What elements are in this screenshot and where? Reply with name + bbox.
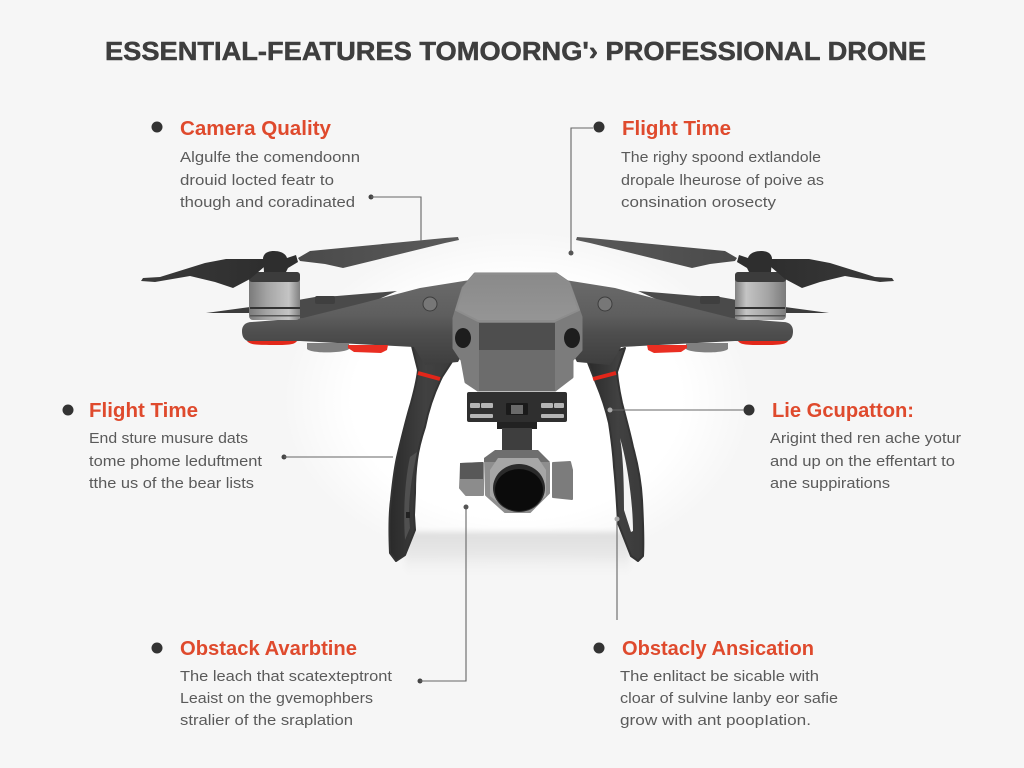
body side lens right bbox=[564, 328, 580, 348]
rear arm bbox=[298, 291, 397, 320]
right landing leg bbox=[587, 348, 643, 561]
motor bbox=[249, 272, 300, 320]
background glow bbox=[282, 230, 752, 570]
red band bbox=[593, 373, 616, 379]
feature: Obstacly Ansication: The enlitact be sicable with bbox=[620, 668, 819, 685]
camera mount bracket bbox=[467, 392, 567, 429]
body side lens left bbox=[455, 328, 471, 348]
left landing leg bbox=[389, 346, 455, 561]
leader line bbox=[608, 408, 744, 412]
feature: Obstack Avarbtine: Obstack Avarbtine bbox=[180, 638, 357, 660]
feature: Camera Quality bbox=[152, 118, 421, 241]
propeller blade right bbox=[298, 237, 459, 268]
camera gimbal bbox=[460, 428, 572, 512]
feature: Flight Time left bbox=[62, 400, 393, 492]
leader line bbox=[282, 454, 393, 460]
leader line bbox=[568, 128, 593, 256]
feature: Obstacly Ansication: grow with ant poopIation. bbox=[620, 712, 811, 729]
leader line bbox=[614, 516, 620, 620]
propeller hub bbox=[263, 251, 298, 272]
feature: Flight Time left: tome phome leduftment bbox=[89, 453, 263, 470]
feature: Camera Quality: drouid locted featr to bbox=[180, 172, 334, 189]
leader line bbox=[368, 194, 421, 241]
feature: Lie Gcupatton: and up on the effentart to bbox=[770, 453, 955, 470]
feature: Obstack Avarbtine: stralier of the sraplation bbox=[180, 712, 353, 729]
feature: Flight Time right: consination orosecty bbox=[621, 194, 777, 211]
feature: Obstack Avarbtine bbox=[152, 504, 468, 729]
camera housing bbox=[485, 451, 549, 512]
underside red light bbox=[247, 341, 297, 345]
feature: Lie Gcupatton: ane suppirations bbox=[770, 475, 890, 492]
ground shadow bbox=[405, 532, 630, 578]
drone illustration bbox=[141, 237, 894, 578]
propeller blade left bbox=[141, 259, 264, 288]
feature: Obstack Avarbtine: The leach that scatexteptront bbox=[180, 668, 393, 685]
gimbal left motor bbox=[460, 463, 483, 495]
left arm with motor and propellers bbox=[141, 237, 470, 365]
arm body bbox=[242, 280, 470, 365]
red indicator bbox=[348, 345, 388, 353]
feature: Lie Gcupatton: Lie Gcupatton: bbox=[772, 400, 914, 422]
feature: Flight Time left: End sture musure dats bbox=[89, 430, 248, 447]
central body bbox=[454, 274, 581, 391]
feature: Obstacly Ansication bbox=[594, 516, 838, 729]
gimbal neck bbox=[502, 428, 532, 452]
right arm with motor and propellers bbox=[565, 237, 894, 365]
feature: Obstack Avarbtine: Leaist on the gvemophbers bbox=[180, 690, 373, 707]
feature: Flight Time left: Flight Time bbox=[89, 400, 198, 422]
feature: Flight Time right bbox=[568, 118, 824, 256]
leader line bbox=[418, 504, 468, 684]
feature: Obstacly Ansication: cloar of sulvine lanby eor safie bbox=[620, 690, 838, 707]
lower folded propeller bbox=[206, 307, 250, 313]
feature: Flight Time right: Flight Time bbox=[622, 118, 731, 140]
feature: Lie Gcupatton: Arigint thed ren ache yotur bbox=[770, 430, 961, 447]
feature: Camera Quality: Camera Quality bbox=[180, 118, 332, 140]
title: ESSENTIAL-FEATURES TOMOORNG'› PROFESSIONAL DRONE bbox=[105, 36, 926, 66]
feature: Lie Gcupatton bbox=[608, 400, 961, 492]
feature: Flight Time right: The righy spoond extlandole bbox=[621, 149, 821, 166]
red band bbox=[418, 373, 440, 379]
feature: Flight Time left: tthe us of the bear lists bbox=[89, 475, 254, 492]
feature: Obstacly Ansication: Obstacly Ansication bbox=[622, 638, 814, 660]
status button bbox=[423, 297, 437, 311]
gimbal right motor bbox=[553, 462, 572, 499]
feature: Camera Quality: though and coradinated bbox=[180, 194, 355, 211]
feature: Camera Quality: Algulfe the comendoonn bbox=[180, 149, 360, 166]
feature: Flight Time right: dropale lheurose of poive as bbox=[621, 172, 824, 189]
camera lens bbox=[493, 464, 545, 512]
arm underside sensor bbox=[307, 343, 349, 352]
